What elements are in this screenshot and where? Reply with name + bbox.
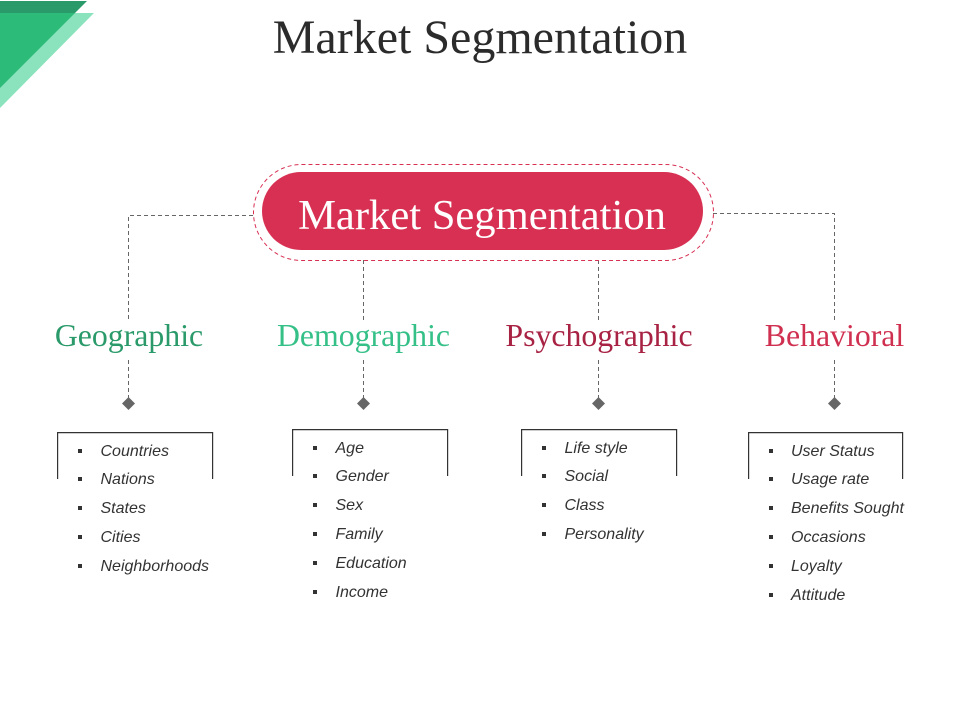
list: behavioral items: Benefits Sought xyxy=(791,500,905,517)
list: demographic items: Income xyxy=(336,584,388,601)
list: geographic items: Cities xyxy=(100,529,141,546)
icon: diamond xyxy=(592,397,605,410)
list: demographic items: Gender xyxy=(336,468,390,485)
list: behavioral items xyxy=(769,443,905,604)
icon: diamond xyxy=(122,397,135,410)
central node: Market Segmentation xyxy=(298,192,666,239)
list: geographic items: Neighborhoods xyxy=(100,558,209,575)
list: psychographic items: Social xyxy=(564,468,609,485)
list: demographic items: Age xyxy=(334,440,364,457)
list: geographic items: States xyxy=(100,500,146,517)
heading: Psychographic: Psychographic xyxy=(505,318,693,353)
list frame xyxy=(293,430,448,476)
heading: Geographic: Geographic xyxy=(55,318,203,353)
list: geographic items: Countries xyxy=(100,443,169,460)
list: behavioral items: User Status xyxy=(791,443,875,460)
list: geographic items: Nations xyxy=(100,471,155,488)
title: Market Segmentation xyxy=(273,11,687,64)
list: behavioral items: Usage rate xyxy=(791,471,869,488)
list: psychographic items xyxy=(542,440,645,543)
list: behavioral items: Occasions xyxy=(791,529,866,546)
list frame xyxy=(749,433,903,479)
list: behavioral items: Attitude xyxy=(790,587,845,604)
list frame xyxy=(522,430,677,476)
corner decoration xyxy=(0,1,94,108)
icon: diamond xyxy=(828,397,841,410)
list: psychographic items: Life style xyxy=(564,440,628,457)
connector lines xyxy=(128,214,834,398)
list: behavioral items: Loyalty xyxy=(791,558,843,575)
central node xyxy=(254,164,714,260)
list: demographic items: Sex xyxy=(336,497,364,514)
list: demographic items xyxy=(313,440,407,601)
list: geographic items xyxy=(78,443,209,575)
list: psychographic items: Class xyxy=(564,497,605,514)
column: Geographic xyxy=(55,318,213,575)
icon: diamond xyxy=(357,397,370,410)
list: demographic items: Family xyxy=(336,526,384,543)
column: Demographic xyxy=(277,318,450,601)
column: Behavioral xyxy=(749,318,905,604)
column: Psychographic xyxy=(505,318,693,543)
heading: Behavioral: Behavioral xyxy=(765,318,904,353)
list: demographic items: Education xyxy=(336,555,407,572)
list: psychographic items: Personality xyxy=(564,526,645,543)
list frame xyxy=(58,433,213,479)
heading: Demographic: Demographic xyxy=(277,318,450,353)
